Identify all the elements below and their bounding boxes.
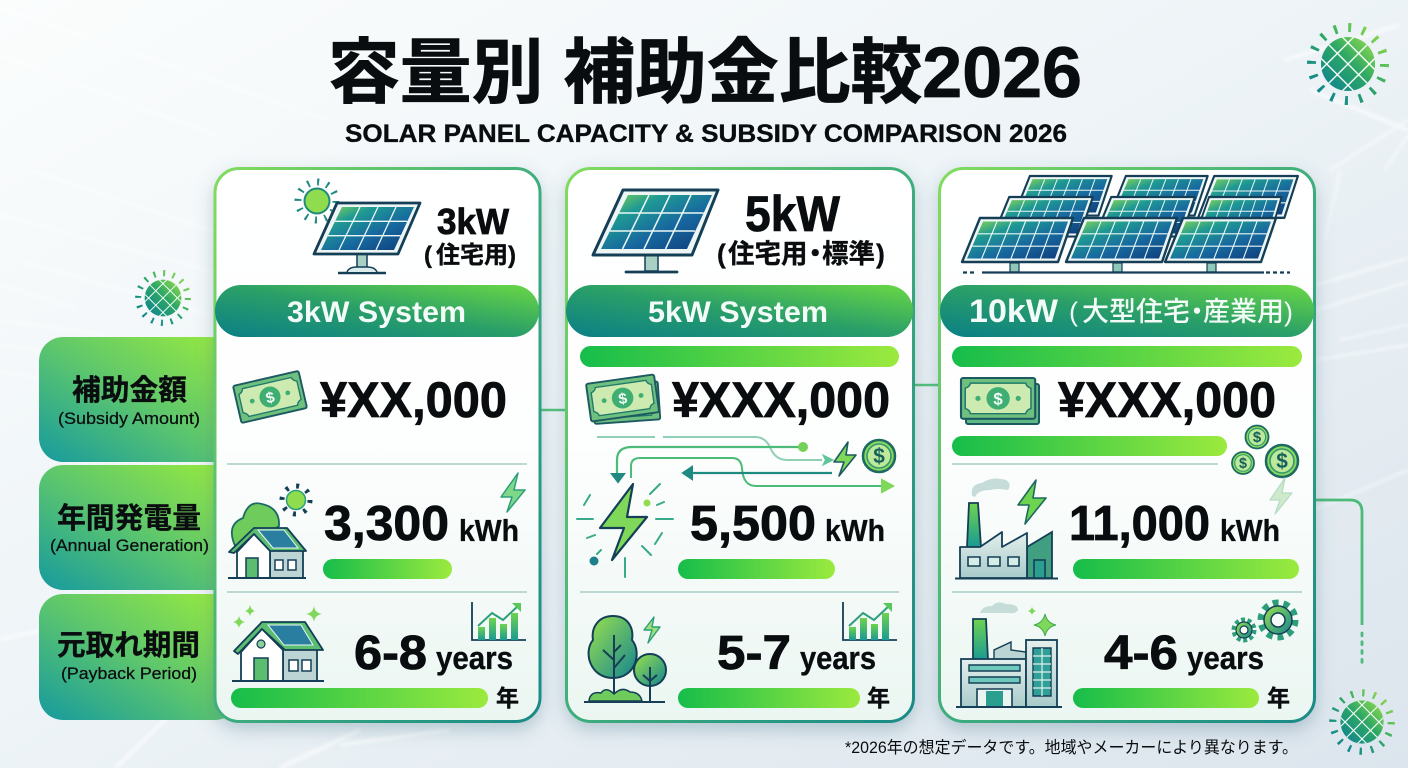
row label: payback period: (Payback Period) bbox=[61, 664, 197, 683]
icon: house with tree bbox=[228, 503, 306, 578]
icon: solar sun top right bbox=[1306, 22, 1390, 106]
icon: factory with office tower bbox=[956, 602, 1062, 707]
icon: solar sun bottom right bbox=[1328, 688, 1396, 756]
capacity sub heading: 住宅用 bbox=[436, 242, 508, 269]
icon: trees bbox=[584, 616, 666, 702]
flow arrows bbox=[597, 437, 893, 492]
generation unit: kWh bbox=[1220, 513, 1280, 548]
capacity sub heading: ) bbox=[876, 239, 885, 269]
panel: 3kW card bbox=[215, 168, 540, 722]
capacity heading: 3kW bbox=[437, 201, 509, 242]
icon: sun bbox=[298, 182, 336, 220]
system pill: 産業用 bbox=[1203, 297, 1284, 327]
subsidy value: ¥XXX,000 bbox=[1058, 372, 1276, 428]
payback bar bbox=[678, 688, 860, 708]
row label: subsidy amount: 補助金額 bbox=[72, 374, 187, 407]
system pill: 大型住宅 bbox=[1082, 297, 1190, 327]
payback bar bbox=[1073, 688, 1259, 708]
year label: 年 bbox=[867, 685, 890, 711]
payback value: 4-6 bbox=[1104, 627, 1178, 680]
icon: lightning bbox=[501, 473, 525, 512]
system pill: 10kW bbox=[969, 293, 1059, 329]
payback value: 6-8 bbox=[354, 627, 427, 680]
system pill: ・ bbox=[1184, 297, 1210, 327]
system pill bbox=[566, 285, 913, 337]
payback unit: years bbox=[1187, 640, 1264, 676]
subsidy bar bbox=[580, 346, 899, 367]
panel: 10kW card bbox=[940, 168, 1314, 722]
capacity sub heading: ) bbox=[508, 242, 516, 269]
generation unit: kWh bbox=[825, 513, 885, 548]
icon: growth chart bbox=[843, 602, 897, 640]
generation bar bbox=[1073, 559, 1299, 579]
title: 容量別 補助金比較2026 bbox=[328, 34, 1082, 113]
row label: annual generation: 年間発電量 bbox=[57, 502, 201, 535]
icon: solar panel bbox=[314, 203, 420, 273]
icon: gears bbox=[1234, 602, 1296, 640]
icon: faint lightning bbox=[1270, 478, 1292, 514]
icon: solar farm bbox=[962, 176, 1298, 272]
subtitle: SOLAR PANEL CAPACITY & SUBSIDY COMPARISON 2026 bbox=[345, 120, 1067, 148]
secondary subsidy bar bbox=[952, 436, 1227, 456]
system pill: ( bbox=[1069, 297, 1078, 327]
capacity sub heading: 標準 bbox=[822, 239, 875, 269]
icon: sun small bbox=[282, 486, 310, 514]
generation unit: kWh bbox=[459, 513, 519, 548]
icon: coins bbox=[1232, 426, 1298, 477]
capacity sub heading: ( bbox=[424, 242, 432, 269]
capacity heading: 5kW bbox=[745, 186, 841, 242]
row label: subsidy amount bbox=[39, 337, 239, 462]
capacity sub heading: ( bbox=[717, 239, 726, 269]
row label: payback period: 元取れ期間 bbox=[57, 629, 200, 662]
icon: factory with lightning bbox=[955, 479, 1058, 578]
generation bar bbox=[323, 559, 452, 579]
payback value: 5-7 bbox=[717, 627, 791, 680]
icon: large lightning with sparks bbox=[577, 484, 673, 577]
subsidy value: ¥XXX,000 bbox=[672, 372, 890, 428]
year label: 年 bbox=[496, 685, 519, 711]
icon: coin bbox=[863, 440, 895, 472]
subsidy value: ¥XX,000 bbox=[320, 372, 507, 428]
system pill: 5kW System bbox=[648, 296, 828, 329]
system pill: 3kW System bbox=[287, 296, 466, 329]
panel: 5kW card bbox=[566, 168, 914, 722]
footnote: *2026年の想定データです。地域やメーカーにより異なります。 bbox=[845, 737, 1298, 757]
subsidy bar bbox=[952, 346, 1302, 367]
capacity sub heading: ・ bbox=[802, 239, 828, 269]
payback unit: years bbox=[436, 640, 513, 676]
icon: house with solar roof bbox=[232, 605, 324, 681]
year label: 年 bbox=[1267, 685, 1290, 711]
generation bar bbox=[678, 559, 835, 579]
capacity sub heading: 住宅用 bbox=[728, 239, 808, 269]
system pill bbox=[215, 285, 539, 337]
generation value: 3,300 bbox=[324, 497, 449, 551]
icon: banknote bbox=[233, 371, 307, 423]
system pill bbox=[940, 285, 1314, 337]
icon: banknote stack bbox=[961, 378, 1039, 424]
generation value: 11,000 bbox=[1069, 497, 1210, 551]
connector: card 3 to sun bbox=[1314, 500, 1362, 668]
generation value: 5,500 bbox=[690, 497, 816, 551]
row label: payback period bbox=[39, 594, 239, 720]
icon: banknote stack bbox=[586, 374, 660, 424]
row label: annual generation bbox=[39, 465, 239, 590]
icon: solar panel bbox=[593, 190, 718, 272]
payback unit: years bbox=[800, 640, 876, 676]
row label: annual generation: (Annual Generation) bbox=[50, 536, 209, 555]
row label: subsidy amount: (Subsidy Amount) bbox=[58, 409, 200, 428]
connector: card 1 to card 2 bbox=[538, 409, 568, 411]
payback bar bbox=[231, 688, 488, 708]
icon: growth chart bbox=[472, 602, 526, 640]
connector: card 2 to card 3 bbox=[912, 384, 941, 386]
icon: small lightning bbox=[834, 442, 856, 476]
system pill: ) bbox=[1284, 297, 1293, 327]
icon: solar sun left bbox=[134, 269, 192, 327]
